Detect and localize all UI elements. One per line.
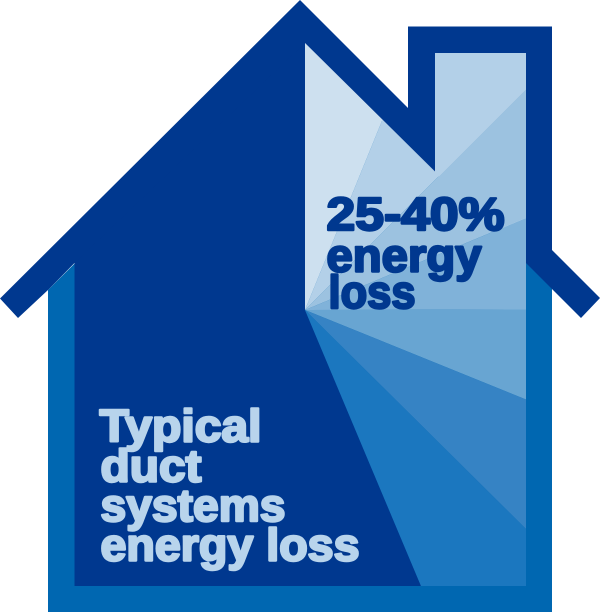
callout: 25-40% energy loss: loss: [328, 266, 416, 318]
energy loss fan: [305, 43, 526, 586]
house outer wall: [48, 40, 552, 612]
heading: typical duct systems energy loss: systems: [100, 480, 286, 531]
heading: typical duct systems energy loss: duct: [100, 440, 202, 492]
fan segment 1: [305, 43, 382, 310]
callout: 25-40% energy loss: [326, 188, 504, 318]
fan segment 4: [305, 218, 526, 310]
fan segment 5: [305, 310, 526, 400]
roof and chimney outline: [0, 0, 600, 318]
fan segment 2: [305, 53, 526, 310]
heading: typical duct systems energy loss: energy loss: [100, 520, 360, 570]
house interior: dark blue duct area: [74, 20, 421, 586]
heading: typical duct systems energy loss: [100, 400, 360, 570]
heading: typical duct systems energy loss: Typical: [100, 400, 262, 452]
fan segment 6: [305, 310, 526, 529]
callout: 25-40% energy loss: 25-40%: [326, 188, 504, 240]
fan segment 3: [305, 89, 526, 310]
fan segment 7: [305, 310, 526, 586]
callout: 25-40% energy loss: energy: [326, 230, 482, 282]
